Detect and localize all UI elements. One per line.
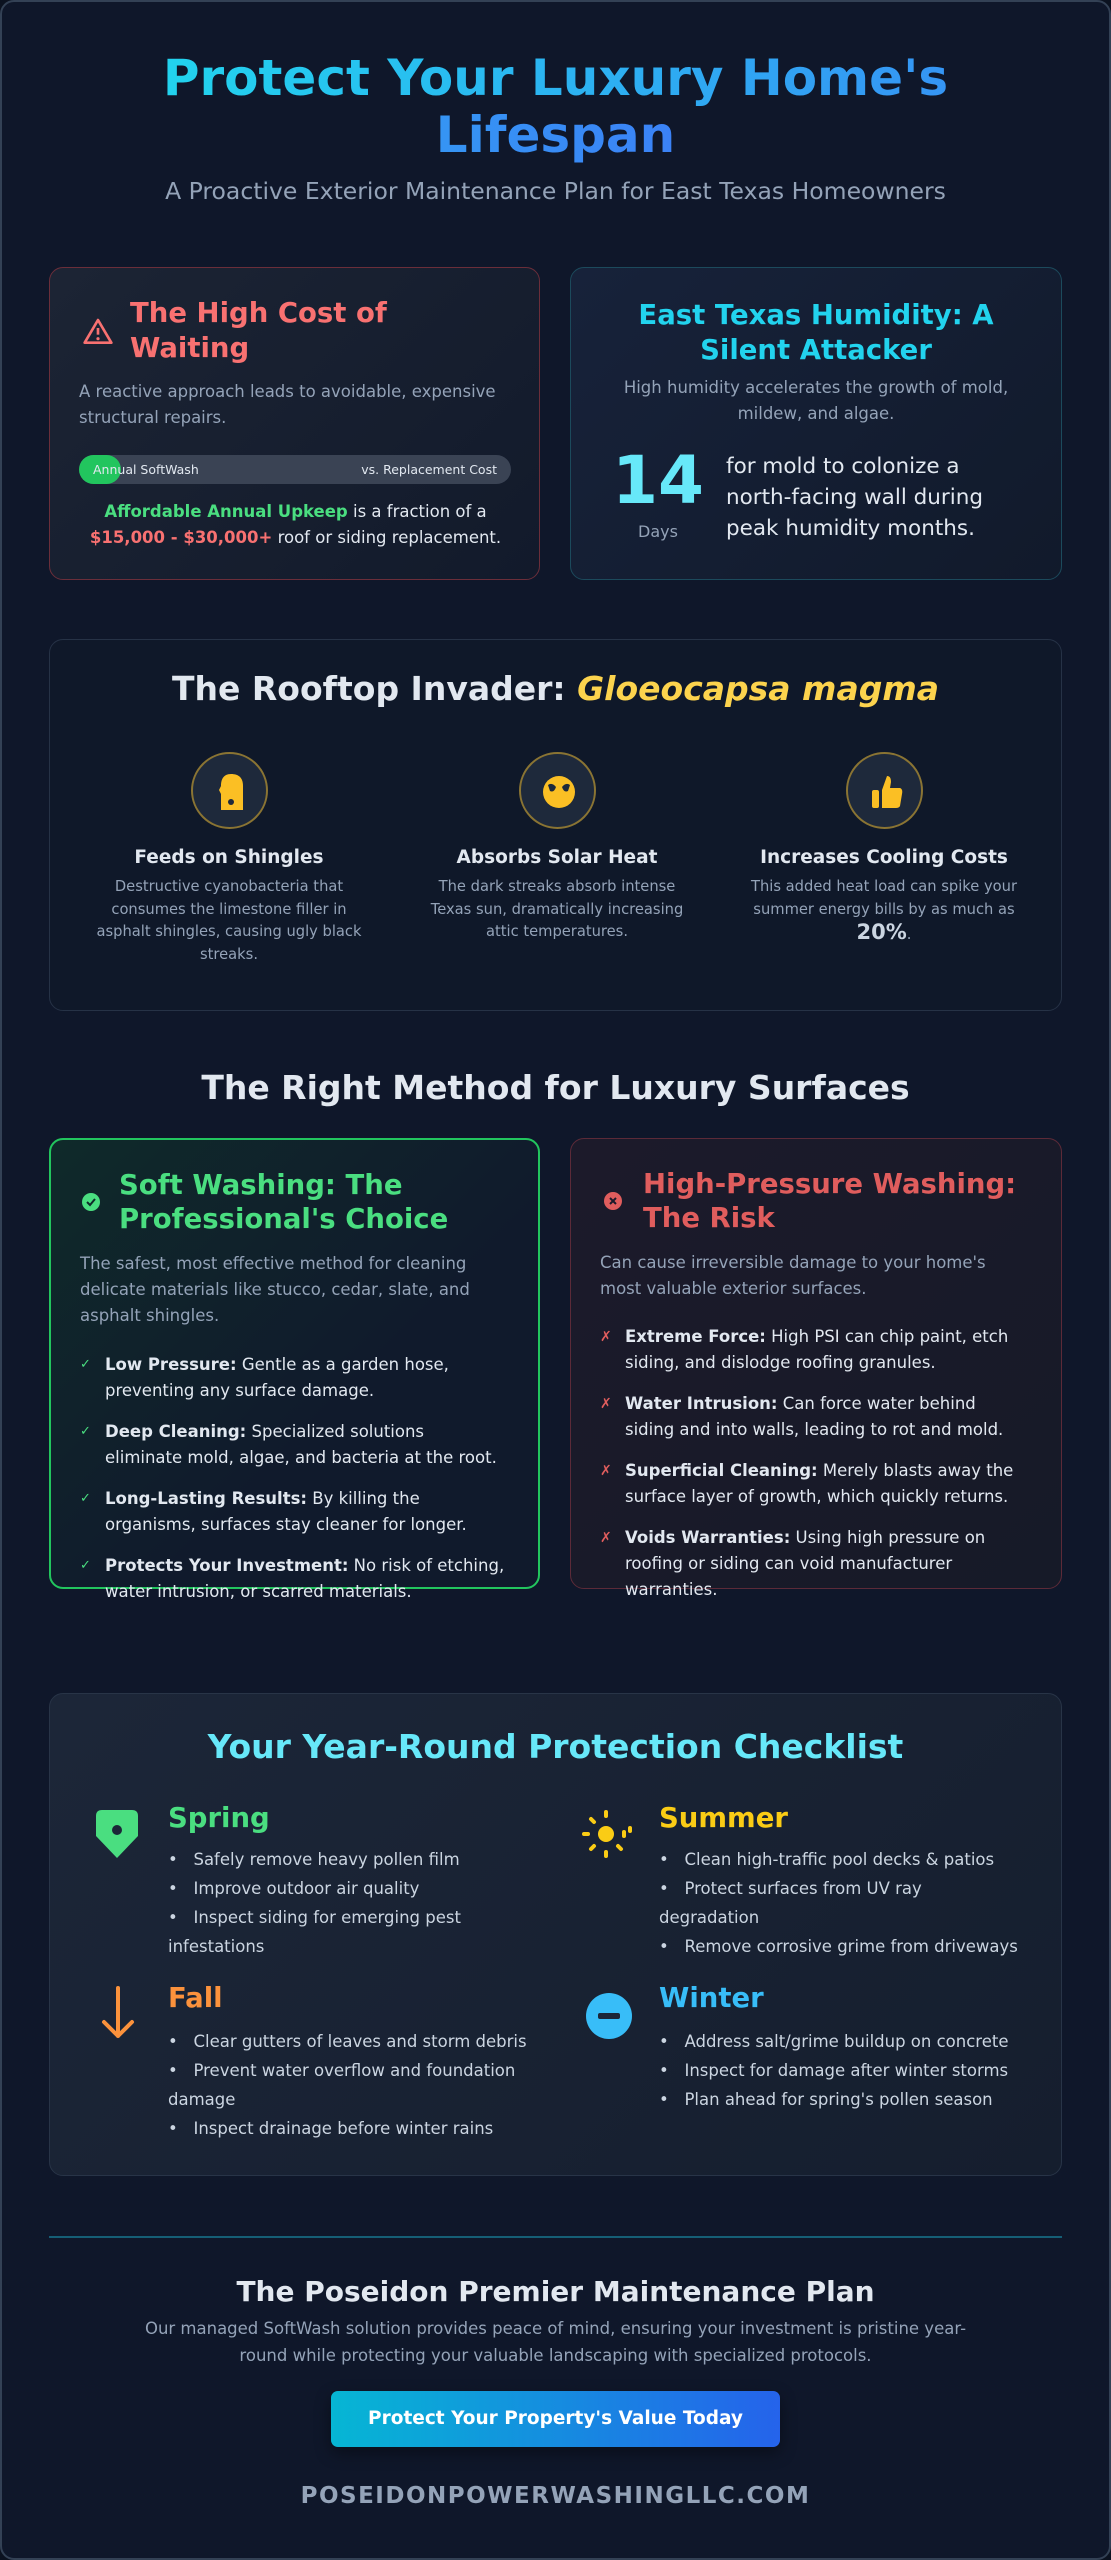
icon: minus circle — [586, 1993, 632, 2039]
website: POSEIDONPOWERWASHINGLLC.COM — [301, 2483, 810, 2509]
item: cooling costs: Increases Cooling Costs — [760, 847, 1008, 868]
list: benefits: Protects Your Investment: No risk of etching, — [105, 1556, 504, 1575]
season: summer: Summer — [659, 1802, 788, 1834]
list: risks: ✗ — [600, 1463, 612, 1479]
season: winter: • Address salt/grime buildup on concrete — [659, 2032, 1008, 2051]
heading: Waiting — [130, 332, 249, 364]
heading: High-Pressure Washing: — [643, 1168, 1016, 1200]
season: spring: • Inspect siding for emerging pest infestations — [168, 1908, 461, 1956]
stat: 14 days: 14 — [612, 442, 704, 519]
list: risks: ✗ — [600, 1396, 612, 1412]
heading: Silent Attacker — [700, 334, 932, 366]
heading: right method: The Right Method for Luxury Surfaces — [201, 1068, 910, 1107]
season: fall: • Prevent water overflow and foundation damage — [168, 2061, 515, 2109]
icon: down arrow — [102, 1986, 134, 2038]
bar: cost comparison: vs. Replacement Cost — [361, 462, 497, 477]
heading — [638, 299, 994, 366]
heading — [130, 297, 388, 364]
icon: shingle — [190, 752, 268, 829]
season: spring: • Improve outdoor air quality — [168, 1879, 419, 1898]
list: benefits: Deep Cleaning: Specialized solutions — [105, 1422, 424, 1441]
season: summer: • Clean high-traffic pool decks & patios — [659, 1850, 994, 1869]
panel: soft washing — [49, 1138, 540, 1589]
season: winter: • Plan ahead for spring's pollen season — [659, 2090, 993, 2109]
icon: x circle — [604, 1192, 622, 1210]
button: call to action — [331, 2391, 780, 2447]
icon: thumbs up — [846, 752, 922, 829]
season: fall: • Inspect drainage before winter rains — [168, 2119, 493, 2138]
season: fall: • Clear gutters of leaves and storm debris — [168, 2032, 527, 2051]
season: summer: • Protect surfaces from UV ray degradation — [659, 1879, 922, 1927]
list: risks: Superficial Cleaning: Merely blasts away the surface layer of growth, which quickly returns. — [625, 1461, 1013, 1506]
heading: The Rooftop Invader: Gloeocapsa magma — [172, 669, 939, 708]
icon: tag — [96, 1810, 138, 1858]
season: spring: Spring — [168, 1802, 270, 1834]
list: benefits — [80, 1355, 504, 1601]
icon: check circle — [82, 1193, 100, 1211]
panel: rooftop invader — [49, 639, 1062, 1011]
text: Can cause irreversible damage to your home's most valuable exterior surfaces. — [600, 1253, 986, 1298]
panel: high pressure risk — [570, 1138, 1062, 1589]
item: absorbs solar heat: Absorbs Solar Heat — [457, 847, 657, 868]
heading: Professional's Choice — [119, 1203, 448, 1235]
heading: Soft Washing: The — [119, 1169, 402, 1201]
item: feeds on shingles: Feeds on Shingles — [134, 847, 324, 868]
list: benefits: water intrusion, or scarred materials. — [105, 1582, 412, 1601]
text: upkeep note: Affordable Annual Upkeep is a fraction of a — [104, 502, 487, 521]
list: risks: ✗ — [600, 1530, 612, 1546]
list: benefits: organisms, surfaces stay cleaner for longer. — [105, 1515, 467, 1534]
stat text — [726, 454, 983, 541]
panel: humidity — [570, 267, 1062, 580]
icon: sun — [582, 1810, 632, 1858]
season: winter: Winter — [659, 1982, 764, 2014]
list: benefits: ✓ — [80, 1491, 91, 1506]
list: risks: ✗ — [600, 1329, 612, 1345]
list: benefits: ✓ — [80, 1424, 91, 1439]
list: risks: Extreme Force: High PSI can chip paint, etch siding, and dislodge roofing granules. — [625, 1327, 1008, 1372]
item: feeds on shingles: Destructive cyanobacteria that consumes the limestone filler in asphalt shingles, causing ugly black streaks. — [96, 878, 362, 962]
bar: cost comparison — [79, 455, 511, 484]
season: winter — [586, 1982, 1008, 2109]
list: benefits: ✓ — [80, 1558, 91, 1573]
item: cooling costs: This added heat load can spike your summer energy bills by as much as 20%. — [751, 878, 1017, 944]
heading: The Risk — [643, 1202, 775, 1234]
list: risks — [600, 1327, 1013, 1599]
season: winter: • Inspect for damage after winter storms — [659, 2061, 1008, 2080]
icon: sun face — [518, 752, 596, 829]
item: cooling costs — [750, 752, 1018, 944]
item: absorbs solar heat — [430, 752, 683, 940]
list: benefits: preventing any surface damage. — [105, 1381, 374, 1400]
title: Lifespan — [436, 106, 675, 164]
list: risks: Water Intrusion: Can force water behind siding and into walls, leading to rot and mold. — [625, 1394, 1003, 1439]
stat text: peak humidity months. — [726, 516, 975, 541]
season: fall: Fall — [168, 1982, 223, 2014]
stat text: north-facing wall during — [726, 485, 983, 510]
text — [624, 378, 1008, 423]
list: benefits: eliminate mold, algae, and bacteria at the root. — [105, 1448, 497, 1467]
season: summer: • Remove corrosive grime from driveways — [659, 1937, 1018, 1956]
list: benefits: Low Pressure: Gentle as a garden hose, — [105, 1355, 449, 1374]
text: upkeep note — [90, 502, 501, 547]
item: feeds on shingles — [96, 752, 362, 962]
text: High humidity accelerates the growth of mold, — [624, 378, 1008, 397]
footer heading: The Poseidon Premier Maintenance Plan — [236, 2275, 875, 2308]
stat text: for mold to colonize a — [726, 454, 960, 479]
item: absorbs solar heat: The dark streaks absorb intense Texas sun, dramatically increasing attic temperatures. — [431, 878, 683, 940]
list: benefits: Long-Lasting Results: By killing the — [105, 1489, 420, 1508]
heading: Your Year-Round Protection Checklist — [208, 1727, 903, 1766]
season: spring: • Safely remove heavy pollen film — [168, 1850, 460, 1869]
heading: East Texas Humidity: A — [638, 299, 994, 331]
title: Protect Your Luxury Home's — [163, 49, 948, 107]
stat: 14 days: Days — [638, 522, 678, 541]
footer text: Our managed SoftWash solution provides peace of mind, ensuring your investment is pristine year-round while protecting your valuable landscaping with specialized protocols. — [145, 2319, 966, 2365]
bar: cost comparison: Annual SoftWash — [93, 462, 199, 477]
list: benefits: ✓ — [80, 1357, 91, 1372]
button: call to action: Protect Your Property's Value Today — [368, 2408, 743, 2429]
heading: The High Cost of — [130, 297, 387, 329]
text: mildew, and algae. — [738, 404, 894, 423]
heading — [643, 1168, 1016, 1234]
text: upkeep note: $15,000 - $30,000+ roof or siding replacement. — [90, 528, 501, 547]
season: summer — [582, 1802, 1018, 1956]
subtitle: A Proactive Exterior Maintenance Plan for East Texas Homeowners — [165, 177, 946, 205]
title — [163, 49, 948, 164]
text: The safest, most effective method for cleaning delicate materials like stucco, cedar, slate, and asphalt shingles. — [80, 1254, 470, 1325]
panel: year-round checklist — [49, 1693, 1062, 2176]
panel: high cost of waiting — [49, 267, 540, 580]
text: A reactive approach leads to avoidable, expensive structural repairs. — [79, 382, 496, 427]
season: fall — [102, 1982, 527, 2138]
list: risks: Voids Warranties: Using high pressure on roofing or siding can void manufacturer warranties. — [625, 1528, 985, 1599]
icon: warning — [83, 318, 113, 344]
season: spring — [96, 1802, 461, 1956]
heading — [119, 1169, 448, 1235]
